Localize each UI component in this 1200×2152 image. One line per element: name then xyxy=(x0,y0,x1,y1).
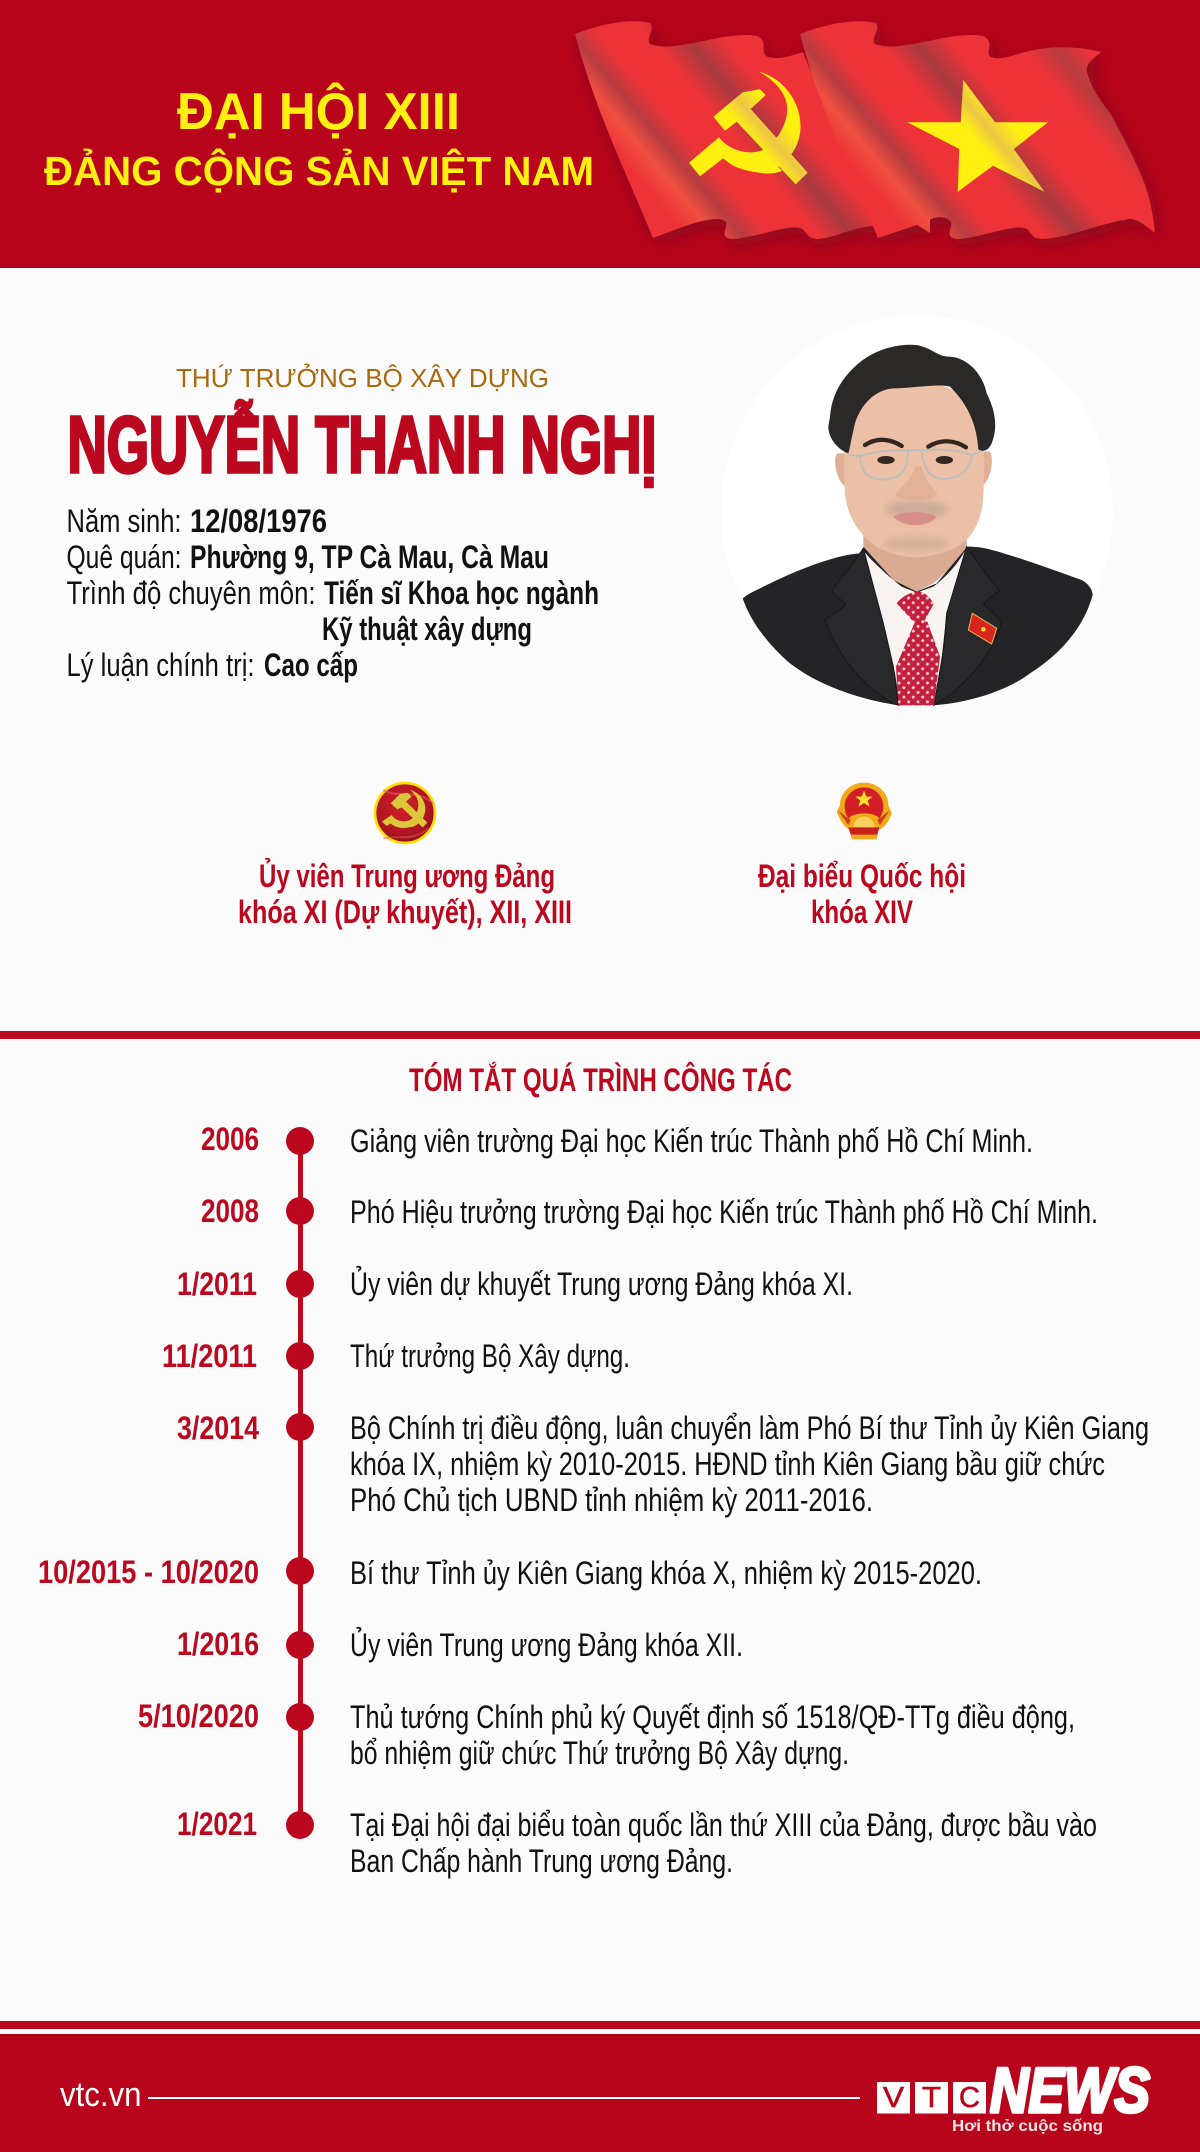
timeline axis xyxy=(298,1141,303,1825)
timeline entry 1/2016: 1/2016 xyxy=(177,1626,259,1662)
text block: personal details: 12/08/1976 xyxy=(190,503,327,539)
timeline entry 5/10/2020: bổ nhiệm giữ chức Thứ trưởng Bộ Xây dựng. xyxy=(350,1735,849,1771)
timeline entry 3/2014: Phó Chủ tịch UBND tỉnh nhiệm kỳ 2011-2016. xyxy=(350,1482,873,1518)
caption: central committee: khóa XI (Dự khuyết), XII, XIII xyxy=(238,894,572,930)
title: event name xyxy=(44,82,594,194)
panel: profile xyxy=(66,315,1113,707)
caption: national assembly: khóa XIV xyxy=(811,894,913,930)
timeline entry 1/2011: Ủy viên dự khuyết Trung ương Đảng khóa XI. xyxy=(350,1266,853,1302)
timeline entry 10/2015 - 10/2020: Bí thư Tỉnh ủy Kiên Giang khóa X, nhiệm kỳ 2015-2020. xyxy=(350,1555,982,1591)
text block: personal details: Lý luận chính trị: xyxy=(66,647,254,683)
timeline entry 1/2016 xyxy=(177,1626,743,1663)
timeline entry 1/2021: Ban Chấp hành Trung ương Đảng. xyxy=(350,1843,733,1879)
timeline entry 2008: 2008 xyxy=(201,1193,259,1229)
panel: footer xyxy=(0,2021,1200,2152)
logo: VTC News xyxy=(877,2056,1150,2135)
timeline entry 1/2011: 1/2011 xyxy=(177,1266,257,1302)
timeline entry 2006: 2006 xyxy=(201,1121,259,1157)
position heading: THỨ TRƯỞNG BỘ XÂY DỰNG xyxy=(176,362,549,393)
panel: credentials xyxy=(238,783,966,930)
timeline entry 5/10/2020: 5/10/2020 xyxy=(138,1698,259,1734)
timeline entry 11/2011 xyxy=(162,1338,630,1374)
text block: personal details: Phường 9, TP Cà Mau, Cà Mau xyxy=(190,539,549,575)
timeline entry 10/2015 - 10/2020: 10/2015 - 10/2020 xyxy=(38,1554,259,1590)
text block: personal details: Năm sinh: xyxy=(66,503,182,539)
heading: career summary: TÓM TẮT QUÁ TRÌNH CÔNG TÁC xyxy=(409,1062,792,1098)
logo: VTC News: Hơi thở cuộc sống xyxy=(952,2118,1103,2135)
title: event name: ĐẠI HỘI XIII xyxy=(177,82,460,141)
timeline entry 2006: Giảng viên trường Đại học Kiến trúc Thành phố Hồ Chí Minh. xyxy=(350,1123,1033,1159)
text block: personal details xyxy=(66,503,599,683)
timeline entry 1/2016: Ủy viên Trung ương Đảng khóa XII. xyxy=(350,1627,743,1663)
text block: personal details: Tiến sĩ Khoa học ngành xyxy=(324,575,599,611)
name heading: NGUYỄN THANH NGHỊ xyxy=(68,400,656,489)
timeline entry 3/2014 xyxy=(177,1410,1149,1518)
timeline entry 10/2015 - 10/2020 xyxy=(38,1554,982,1591)
text block: personal details: Trình độ chuyên môn: xyxy=(66,575,316,611)
logo: VTC News: V xyxy=(883,2082,905,2114)
caption: central committee xyxy=(238,858,572,930)
text block: personal details: Kỹ thuật xây dựng xyxy=(322,611,532,647)
timeline entry 1/2021 xyxy=(177,1806,1097,1879)
icon: national emblem xyxy=(837,783,892,839)
portrait photo illustration xyxy=(721,315,1113,707)
icon: party flag and national flag xyxy=(575,21,1160,245)
icon: hammer and sickle xyxy=(689,72,808,184)
title: event name: ĐẢNG CỘNG SẢN VIỆT NAM xyxy=(44,148,594,194)
text block: personal details: Cao cấp xyxy=(264,647,358,683)
timeline entry 1/2011 xyxy=(177,1266,853,1302)
timeline entry 3/2014: 3/2014 xyxy=(177,1410,259,1446)
panel: career timeline xyxy=(38,1062,1149,1879)
logo: VTC News: T xyxy=(922,2082,941,2114)
timeline entry 11/2011: 11/2011 xyxy=(162,1338,257,1374)
timeline entry 1/2021: 1/2021 xyxy=(177,1806,257,1842)
panel: header banner xyxy=(0,0,1200,268)
logo: VTC News: C xyxy=(959,2082,980,2114)
caption: national assembly: Đại biểu Quốc hội xyxy=(758,858,966,894)
icon: party emblem xyxy=(375,783,435,843)
caption: central committee: Ủy viên Trung ương Đảng xyxy=(259,858,555,894)
text block: personal details: Quê quán: xyxy=(66,539,182,575)
timeline entry 2006 xyxy=(201,1121,1033,1159)
logo: VTC News: NEWS xyxy=(990,2056,1150,2126)
timeline entry 5/10/2020 xyxy=(138,1698,1075,1771)
icon: yellow star xyxy=(907,80,1048,192)
footer site name: vtc.vn xyxy=(60,2076,142,2114)
timeline entry 11/2011: Thứ trưởng Bộ Xây dựng. xyxy=(350,1338,630,1374)
caption: national assembly xyxy=(758,858,966,930)
